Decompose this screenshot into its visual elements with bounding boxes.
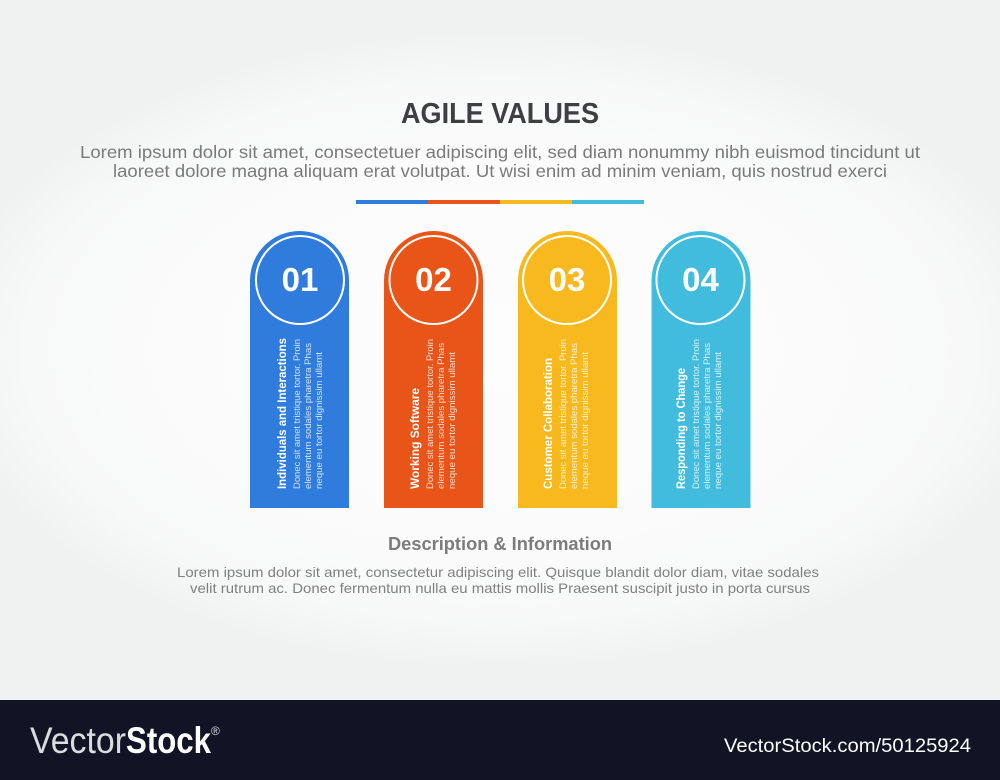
footer logo: Vector	[30, 720, 126, 761]
card 03 body text: Donec sit amet tristique tortor. Proin	[558, 339, 569, 489]
card 04 body text: neque eu tortor dignissim ullamt	[713, 352, 724, 489]
description text: Lorem ipsum dolor sit amet, consectetur adipiscing elit. Quisque blandit dolor diam, vitae sodales	[177, 564, 819, 580]
card 01 body text: neque eu tortor dignissim ullamt	[314, 352, 325, 489]
footer logo: ®	[211, 724, 220, 738]
card 04 heading: Responding to Change	[674, 368, 688, 489]
card 03 body text: neque eu tortor dignissim ullamt	[580, 352, 591, 489]
card 02 body text: Donec sit amet tristique tortor. Proin	[425, 339, 436, 489]
footer logo	[30, 720, 220, 761]
card 01 body text: elementum sodales pharetra Phas	[303, 343, 314, 489]
footer logo: Stock	[126, 720, 211, 761]
card 02 body text: elementum sodales pharetra Phas	[436, 343, 447, 489]
number 04: 04	[682, 261, 719, 298]
card 04 body text	[691, 339, 724, 489]
card 01 heading: Individuals and Interactions	[275, 338, 289, 489]
footer banner	[0, 700, 1000, 780]
number 01: 01	[282, 261, 318, 298]
description text: velit rutrum ac. Donec fermentum nulla eu mattis mollis Praesent suscipit justo in porta cursus	[190, 580, 810, 596]
title: AGILE VALUES	[401, 98, 599, 130]
card 03 body text: elementum sodales pharetra Phas	[569, 343, 580, 489]
card 03 body text	[558, 339, 591, 489]
description heading: Description & Information	[388, 534, 612, 554]
number 02: 02	[415, 261, 452, 298]
card 02 body text: neque eu tortor dignissim ullamt	[447, 352, 458, 489]
intro text: Lorem ipsum dolor sit amet, consectetuer adipiscing elit, sed diam nonummy nibh euismod tincidunt ut	[80, 142, 920, 162]
card 01 body text: Donec sit amet tristique tortor. Proin	[292, 339, 303, 489]
card 04 body text: elementum sodales pharetra Phas	[702, 343, 713, 489]
colored divider bar	[356, 200, 644, 204]
intro text	[80, 142, 920, 181]
card 02 body text	[425, 339, 458, 489]
description text	[177, 564, 819, 596]
panel: card 01	[250, 231, 349, 508]
panel: card 04	[652, 231, 750, 508]
card 04 body text: Donec sit amet tristique tortor. Proin	[691, 339, 702, 489]
footer image id: VectorStock.com/50125924	[724, 736, 971, 757]
number 03: 03	[549, 261, 585, 298]
intro text: laoreet dolore magna aliquam erat volutpat. Ut wisi enim ad minim veniam, quis nostrud exerci	[113, 161, 887, 181]
panel: card 03	[518, 231, 617, 508]
card 01 body text	[292, 339, 325, 489]
card 03 heading: Customer Collaboration	[541, 358, 555, 489]
card 02 heading: Working Software	[408, 388, 422, 489]
panel: card 02	[384, 231, 483, 508]
